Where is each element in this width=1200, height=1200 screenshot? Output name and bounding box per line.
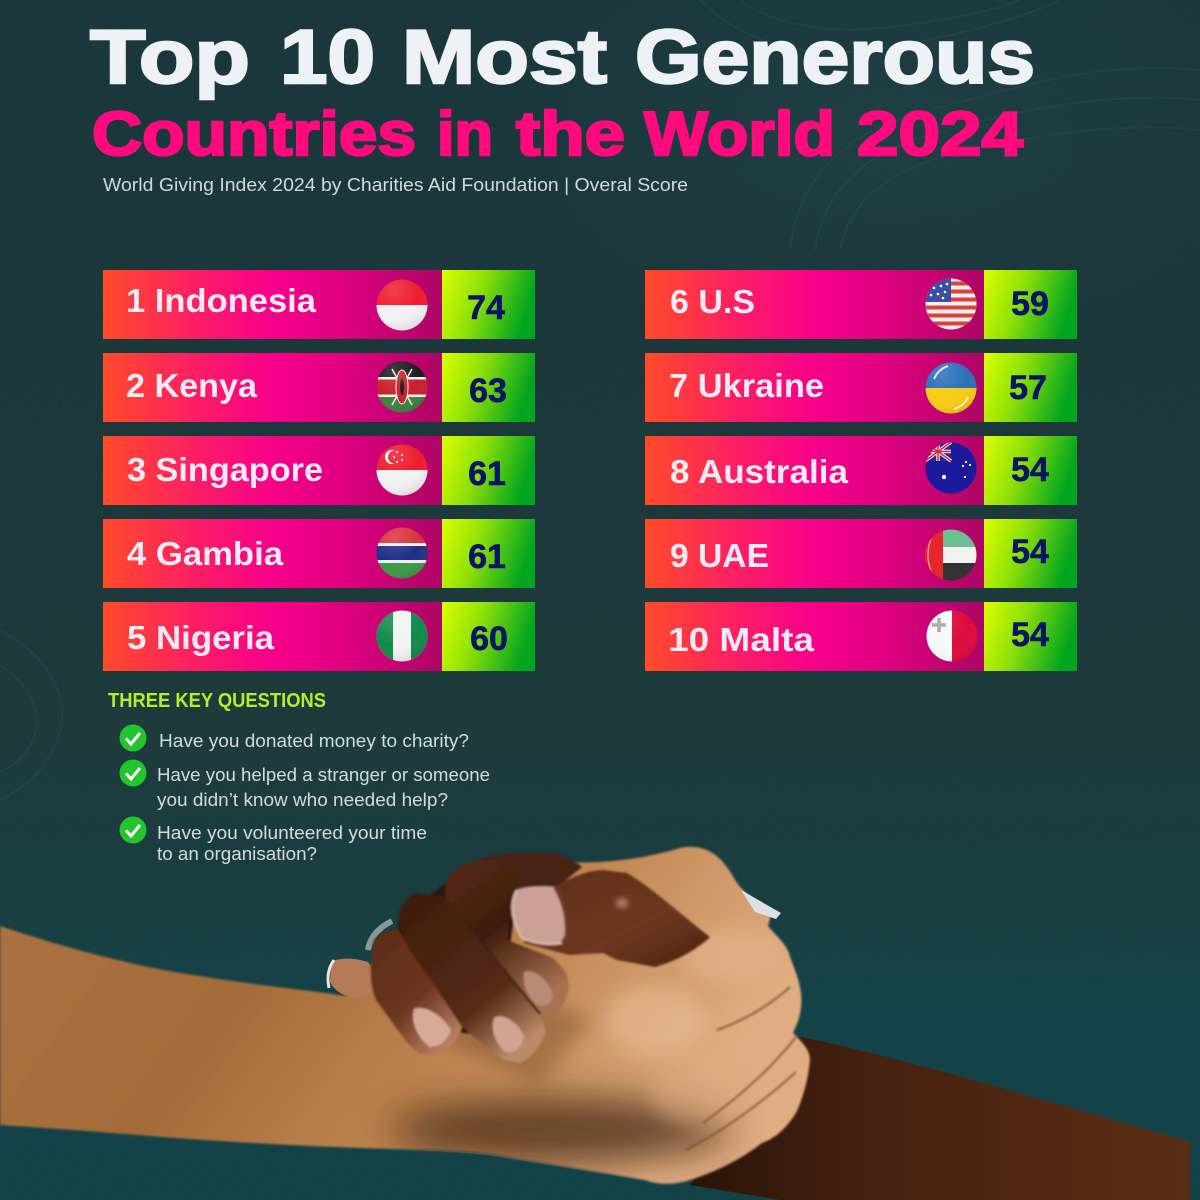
title line 2: in [437, 100, 493, 169]
light thumb tip [328, 921, 392, 997]
light arm and hand [0, 847, 810, 1184]
flag: Kenya [376, 361, 428, 413]
row: 2 Kenya [103, 353, 535, 422]
dark thumb [524, 870, 710, 967]
score: 54 [1011, 451, 1049, 489]
row: 1 Indonesia [103, 270, 535, 339]
flag: Malta [926, 610, 978, 662]
question text: Have you donated money to charity? [159, 730, 469, 751]
country label: 5 Nigeria [127, 619, 275, 656]
row: 9 UAE [645, 519, 1077, 588]
country label: 7 Ukraine [669, 367, 824, 404]
icon: check [120, 760, 146, 786]
country label: 3 Singapore [127, 451, 323, 488]
row: 10 Malta [645, 602, 1077, 671]
flag: Singapore [376, 444, 428, 496]
row: 4 Gambia [103, 519, 535, 588]
row: 7 Ukraine [645, 353, 1077, 422]
country label: 4 Gambia [127, 535, 284, 572]
row: 5 Nigeria [103, 602, 535, 671]
dark arm [690, 1036, 1190, 1200]
hand shading [390, 929, 796, 1162]
question 3 [120, 816, 427, 864]
white fingernail [741, 890, 781, 919]
title line 2: 2024 [857, 100, 1024, 169]
question 1 [120, 724, 469, 752]
score: 54 [1011, 616, 1049, 654]
flag: United States [925, 278, 977, 330]
title line 1: 10 [280, 15, 375, 100]
title line 1: Most [402, 15, 607, 100]
flag: Indonesia [376, 279, 428, 331]
flag: Nigeria [376, 610, 428, 662]
finger C [445, 860, 569, 1017]
country label: 9 UAE [670, 537, 769, 574]
country label: 8 Australia [670, 453, 849, 490]
country label: 1 Indonesia [126, 282, 317, 319]
flag: Australia [925, 442, 977, 494]
score: 61 [468, 455, 506, 493]
score: 74 [467, 289, 505, 327]
question text: you didn’t know who needed help? [157, 789, 448, 810]
row: 3 Singapore [103, 436, 535, 505]
score: 54 [1011, 533, 1049, 571]
dark fingers [371, 853, 710, 1063]
question text: to an organisation? [157, 843, 317, 864]
title line 1: Generous [635, 15, 1035, 100]
icon: check [120, 816, 146, 844]
top hump [446, 853, 582, 920]
nails [413, 1008, 451, 1047]
score: 61 [468, 538, 506, 576]
score: 59 [1011, 285, 1049, 323]
country label: 10 Malta [668, 621, 815, 658]
subtitle: World Giving Index 2024 by Charities Aid Foundation | Overal Score [103, 174, 688, 195]
finger A [371, 929, 462, 1056]
score: 60 [470, 620, 508, 658]
question text: Have you helped a stranger or someone [157, 764, 490, 785]
finger B [398, 893, 545, 1063]
heading: three key questions: THREE KEY QUESTIONS [108, 690, 326, 712]
underlay between fingers [398, 877, 551, 1040]
question text: Have you volunteered your time [157, 822, 427, 843]
row: 8 Australia [645, 436, 1077, 505]
score: 63 [469, 372, 507, 410]
title line 1: Top [90, 15, 250, 100]
illustration: clasped hands [0, 847, 1190, 1200]
question 2 [120, 760, 490, 810]
flag: Gambia [376, 527, 428, 579]
title line 2: the [516, 100, 625, 169]
icon: check [120, 724, 146, 752]
flag: Ukraine [925, 362, 977, 414]
title [90, 15, 1035, 169]
title line 2: Countries [92, 100, 416, 169]
score: 57 [1009, 369, 1047, 407]
country label: 6 U.S [670, 283, 755, 320]
row: 6 U.S [645, 270, 1077, 339]
flag: UAE [925, 529, 977, 581]
country label: 2 Kenya [126, 367, 258, 404]
title line 2: World [644, 100, 835, 169]
